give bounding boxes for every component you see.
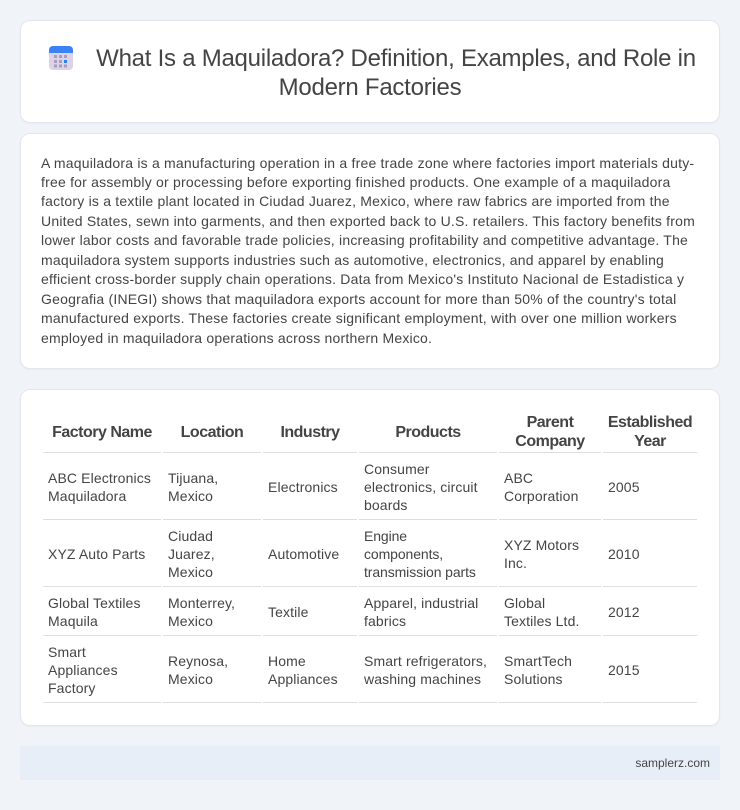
table: factories: Global [504,595,545,611]
panel: description card [20,133,720,369]
table: factories: Maquiladora [48,488,126,504]
table: factories: Corporation [504,488,578,504]
table: factories: Mexico [168,613,213,629]
header: Parent Company [515,414,585,450]
table: factories: 2012 [608,604,640,620]
title: Modern Factories [279,74,461,101]
text block: description: factory is a textile plant located in Ciudad Juarez, Mexico, where raw fabrics are imported from the [41,193,670,209]
text block: description: maquiladora system supports industries such as automotive, electronics, and apparel by enabling [41,252,664,268]
table: factories: Engine [364,528,407,544]
table: factories: 2010 [608,546,640,562]
header: Parent Company: Company [515,433,585,450]
table: factories: ABC Electronics [48,470,151,486]
text block: description: Geografia (INEGI) shows that maquiladora exports account for more than 50% of the country's total [41,291,676,307]
panel: title card [20,20,720,123]
row: Global Textiles [48,595,640,629]
header: Parent Company: Parent [527,414,573,431]
header: Industry: Industry [280,424,340,441]
icon: calendar [49,46,73,70]
table: factories: SmartTech [504,653,572,669]
table: factories: Textile [268,604,309,620]
table: factories: Electronics [268,479,338,495]
table: factories: Factory [48,680,96,696]
table: factories: 2005 [608,479,640,495]
table: factories: XYZ Auto Parts [48,546,145,562]
title: What Is a Maquiladora? Definition, Examples, and Role in [96,45,696,72]
table: factories: Ciudad [168,528,213,544]
row: Smart Appliances [48,644,640,696]
title [96,45,696,101]
footer bar [20,746,720,780]
table: factories: Monterrey, [168,595,235,611]
footer text: samplerz.com [635,756,710,770]
text block: description: free for assembly or processing before exporting finished products. One example of a maquiladora [41,174,670,190]
table: factories: Mexico [168,564,213,580]
panel: factory table card [20,389,720,726]
text block: description: manufactured exports. These factories create significant employment, with over one million workers [41,310,677,326]
table: factories: XYZ Motors [504,537,579,553]
table: factories: transmission parts [364,564,476,580]
table: factories: Solutions [504,671,563,687]
table: factories: Reynosa, [168,653,228,669]
text block: description: lower labor costs and favorable trade policies, increasing profitability and competitive advantage. The [41,232,688,248]
table: factories: Global Textiles [48,595,141,611]
text block: description [41,154,695,346]
table: factories: electronics, circuit [364,479,478,495]
table: factories: 2015 [608,662,640,678]
table: factories: Maquila [48,613,98,629]
table: factories: Appliances [48,662,118,678]
text block: description: A maquiladora is a manufacturing operation in a free trade zone where factories import materials duty- [41,154,694,170]
text block: description: employed in maquiladora operations across northern Mexico. [41,330,432,346]
text block: description: United States, sewn into garments, and then exported back to U.S. retailers. This factory benefits from [41,213,695,229]
table: factories: Automotive [268,546,339,562]
table: factories: fabrics [364,613,406,629]
header: Established Year [608,414,692,450]
table: factories: Juarez, [168,546,215,562]
table: factories: boards [364,497,408,513]
table: factories: Smart refrigerators, [364,653,487,669]
row: XYZ Auto Parts [48,528,640,580]
table: factories: Tijuana, [168,470,218,486]
table: factories: Inc. [504,555,527,571]
table: factories: Mexico [168,671,213,687]
table: factories: Consumer [364,461,430,477]
table: factories: Smart [48,644,86,660]
table: factories: Apparel, industrial [364,595,478,611]
table: factories: Appliances [268,671,338,687]
table: factories: components, [364,546,443,562]
table: factories: washing machines [364,671,481,687]
table: factories: Textiles Ltd. [504,613,579,629]
header: Location: Location [181,424,243,441]
header: Factory Name: Factory Name [52,424,152,441]
header: Established Year: Established [608,414,692,431]
header: Products: Products [395,424,461,441]
header: Established Year: Year [634,433,666,450]
row: ABC Electronics [48,461,640,513]
text block: description: efficient cross-border supply chain operations. Data from Mexico's Instituto Nacional de Estadistica y [41,271,684,287]
table: factories: ABC [504,470,533,486]
table: factories: Mexico [168,488,213,504]
table: factories: Home [268,653,306,669]
